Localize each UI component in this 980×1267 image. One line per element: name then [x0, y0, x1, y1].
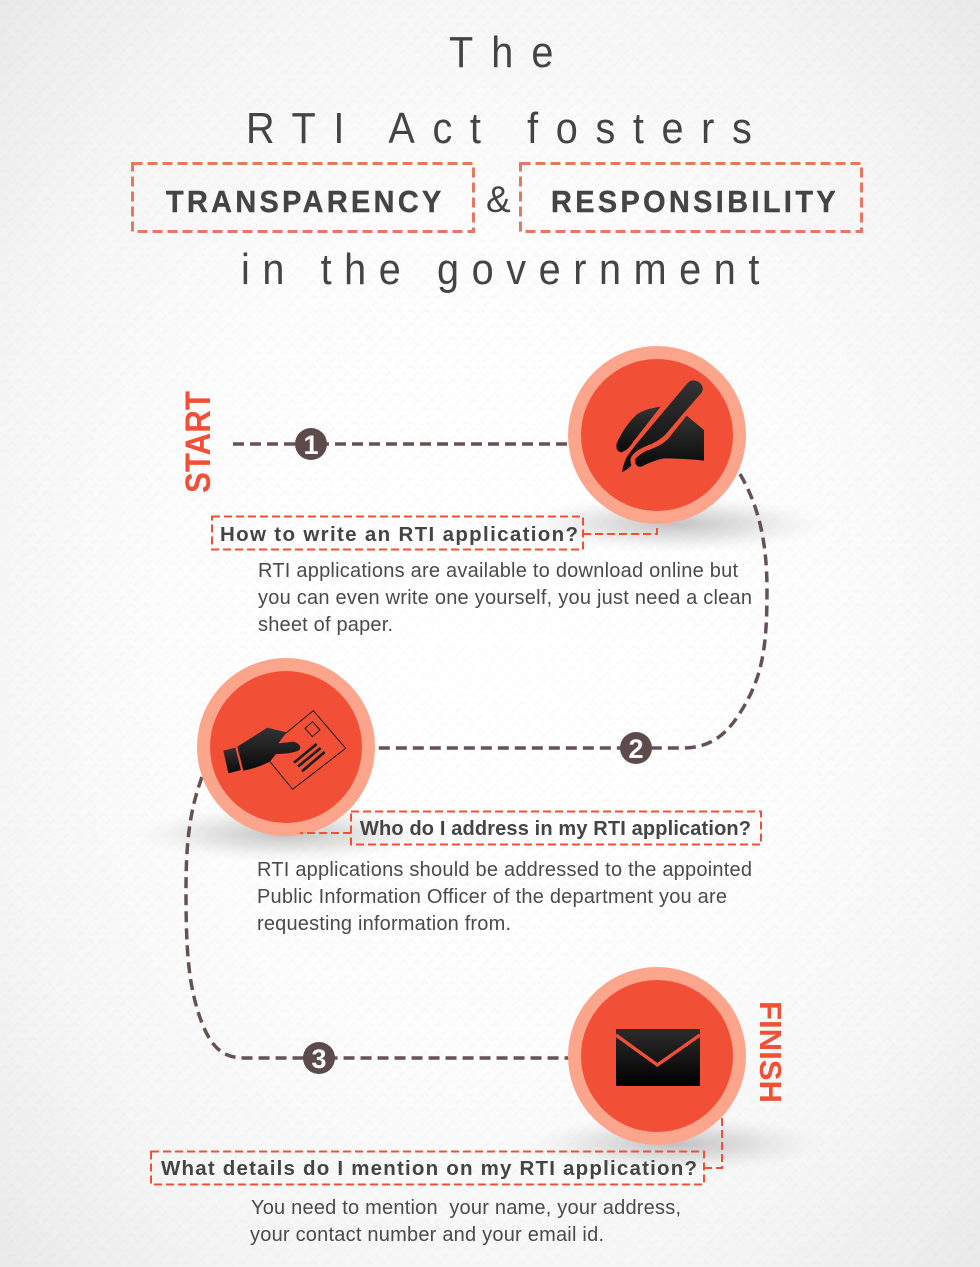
step marker 1: 1 — [303, 430, 319, 460]
answer 1 text: sheet of paper. — [258, 614, 393, 636]
step marker 2: 2 — [628, 734, 644, 764]
icon circle: hand holding postcard — [197, 658, 375, 836]
answer 2 text: requesting information from. — [257, 913, 511, 935]
finish label: FINISH — [753, 1001, 788, 1103]
route segment: step two to step three — [186, 777, 570, 1058]
ampersand: & — [486, 179, 511, 220]
icon circle: hand writing with pen — [568, 346, 746, 524]
title line: The: The — [449, 27, 553, 76]
dashed route — [186, 444, 767, 1058]
title line: RTI Act fosters: RTI Act fosters — [246, 103, 752, 152]
keyword box: responsibility: RESPONSIBILITY — [551, 185, 836, 219]
answer 3 text — [250, 1197, 681, 1246]
route segment: start to step one — [233, 442, 570, 446]
route segment: step one to step two — [378, 474, 767, 748]
answer 1 text: you can even write one yourself, you just need a clean — [258, 587, 752, 609]
start label: START — [179, 391, 218, 493]
question 2 label — [300, 812, 761, 844]
answer 2 text — [257, 859, 752, 935]
answer 2 text: Public Information Officer of the department you are — [257, 886, 727, 908]
question 3 label: What details do I mention on my RTI application? — [161, 1157, 697, 1180]
answer 2 text: RTI applications should be addressed to the appointed — [257, 859, 752, 881]
keyword box: responsibility — [520, 164, 862, 232]
answer 3 text: your contact number and your email id. — [250, 1224, 604, 1246]
answer 1 text — [258, 560, 752, 636]
shadows under circles — [135, 496, 830, 1172]
keyword box: transparency — [132, 164, 474, 232]
answer 3 text: You need to mention your name, your address, — [251, 1197, 681, 1219]
step marker 1 — [295, 428, 327, 460]
question 2 label: Who do I address in my RTI application? — [360, 818, 751, 840]
title — [241, 27, 760, 293]
step marker 3: 3 — [311, 1044, 327, 1074]
question 1 label — [212, 516, 657, 550]
step marker 2 — [620, 732, 652, 764]
answer 1 text: RTI applications are available to download online but — [258, 560, 738, 582]
icon circle: envelope — [568, 967, 746, 1145]
step marker 3 — [303, 1042, 335, 1074]
title line: in the government: in the government — [241, 244, 760, 293]
question 3 label — [151, 1118, 722, 1184]
question 1 label: How to write an RTI application? — [220, 523, 578, 546]
keyword box: transparency: TRANSPARENCY — [166, 185, 441, 219]
